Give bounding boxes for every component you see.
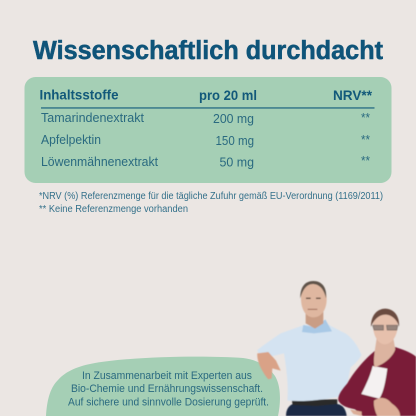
row: Löwenmähnenextrakt: Löwenmähnenextrakt — [41, 154, 158, 169]
callout text: Auf sichere und sinnvolle Dosierung geprüft. — [68, 396, 269, 408]
row: Apfelpektin: 150 mg — [216, 133, 254, 148]
table header: ingredients: Inhaltsstoffe — [40, 86, 119, 102]
callout text: Bio-Chemie und Ernährungswissenschaft. — [71, 383, 263, 395]
row: Apfelpektin: Apfelpektin — [41, 132, 101, 147]
footnote: NRV reference: *NRV (%) Referenzmenge für die tägliche Zufuhr gemäß EU-Verordnung (1169/2011) — [39, 191, 383, 202]
photo: two experts — [257, 281, 416, 416]
row: Apfelpektin: ** — [361, 132, 370, 147]
row: Löwenmähnenextrakt: ** — [361, 153, 370, 168]
title: Wissenschaftlich durchdacht — [33, 37, 383, 65]
woman — [338, 309, 416, 416]
table header: NRV: NRV** — [333, 87, 373, 103]
row: Tamarindenextrakt: 200 mg — [213, 111, 254, 126]
row: Löwenmähnenextrakt: 50 mg — [220, 154, 254, 170]
footnote: no reference: ** Keine Referenzmenge vorhanden — [39, 204, 188, 215]
row: Löwenmähnenextrakt — [41, 153, 370, 170]
row: Apfelpektin — [41, 132, 370, 148]
callout: expert collaboration — [46, 357, 280, 416]
panel: ingredients table — [24, 77, 392, 183]
row: Tamarindenextrakt: Tamarindenextrakt — [41, 110, 144, 125]
callout text: In Zusammenarbeit mit Experten aus — [82, 370, 253, 382]
row: Tamarindenextrakt: ** — [361, 110, 370, 125]
table header: amount: pro 20 ml — [199, 87, 257, 103]
callout text — [68, 370, 269, 408]
man — [257, 281, 362, 416]
row: Tamarindenextrakt — [41, 110, 370, 126]
